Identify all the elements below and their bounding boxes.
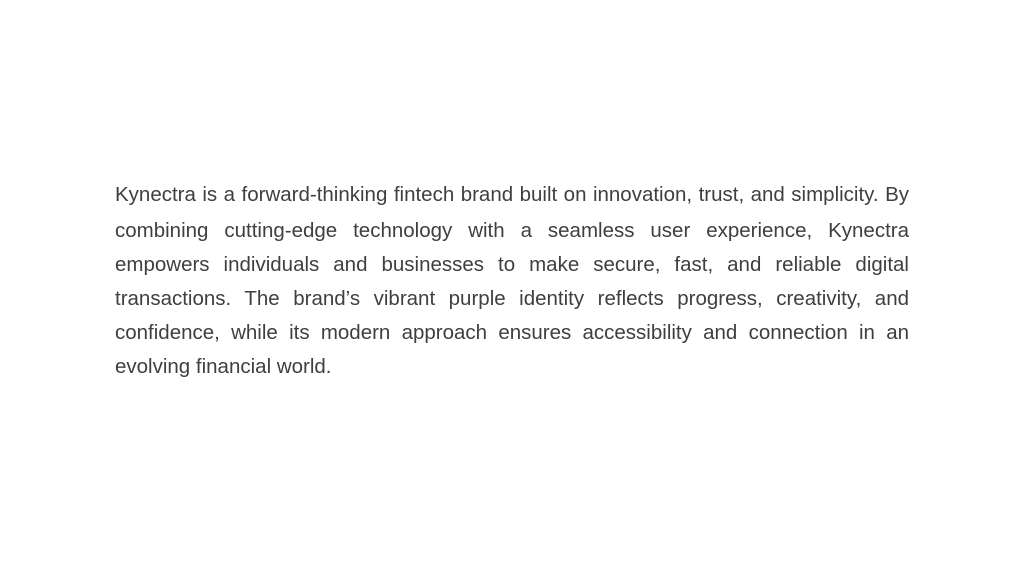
text block: brand description: evolving financial world. bbox=[115, 355, 332, 378]
text block: brand description: Kynectra is a forward-thinking fintech brand built on innovation, trust, and simplicity. By bbox=[115, 183, 909, 206]
text block: brand description: combining cutting-edge technology with a seamless user experience, Kynectra bbox=[115, 219, 909, 242]
text block: brand description: transactions. The brand’s vibrant purple identity reflects progress, creativity, and bbox=[115, 287, 909, 310]
text block: brand description: empowers individuals and businesses to make secure, fast, and reliable digital bbox=[115, 253, 909, 276]
text block: brand description bbox=[115, 183, 910, 378]
text block: brand description: confidence, while its modern approach ensures accessibility and connection in an bbox=[115, 321, 909, 344]
